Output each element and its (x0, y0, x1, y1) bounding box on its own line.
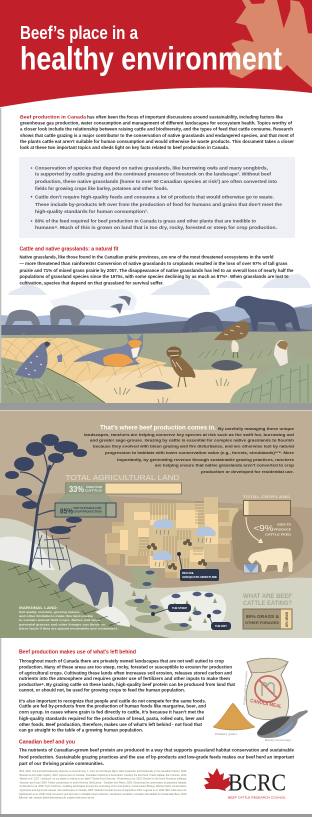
chart: total cropland: TOTAL CROPLAND (243, 494, 290, 499)
icons: crop bundles (147, 539, 207, 570)
text: that's where beef production comes in: progression to habitats with lower conservation value (e.g., forests, shrublands)⁶⁷⁸. More (105, 450, 295, 455)
text: left behind paragraph 1: production. Many of these areas are too steep, rocky, forested or susceptible to erosion for production (19, 665, 232, 670)
illustration: canola meal bag and feed: CANOLA MEAL (250, 698, 282, 710)
illustration: canola meal bag and feed: Distillers grains (215, 732, 238, 736)
panel: key facts: These include by-products left over from the production of food for humans and grains that don’t meet the (35, 202, 282, 207)
icon: logo maple leaf (204, 768, 233, 791)
chart: total agricultural land: TOTAL AGRICULTURAL LAND (66, 473, 180, 482)
divider band (0, 403, 312, 410)
chart: total cropland: <9% (254, 524, 274, 533)
panel: key facts: is supported by cattle grazing and the continued presence of livestock on the landscape¹. Without beef (35, 171, 271, 176)
header banner (0, 0, 312, 107)
text: that's where beef production comes in: landscapes, ranchers are helping conserve key species at risk such as the swift fox, burrowing owl (84, 432, 294, 437)
text: canadian beef and you: part of our thriving prairie communities. (19, 761, 104, 766)
text: left behind paragraph 1 (19, 659, 235, 693)
intro paragraph: has often been the focus of important discussions around sustainability, including factors like (87, 114, 283, 119)
text: marginal land: these lands if they are grazed moderately and sustainably. (19, 627, 118, 631)
text: left behind paragraph 2: corn syrup. In cases where grain is fed directly to cattle, it’s because it hasn’t met the (19, 709, 204, 714)
chart: total agricultural land: 85% (60, 506, 73, 516)
text: references: ¹Bird, 2018. Soil and field biodiversity depends on beef farming. J. Anim Sci and Range Mgmt, Beef production and biodiversity in the Canadian Prairies, 2018. (19, 769, 187, 773)
icon: scoop of grain (257, 710, 308, 738)
icon: songbird (274, 340, 288, 366)
chart: total agricultural land: USED FOR (86, 485, 102, 489)
text: marginal land: MARGINAL LAND: (19, 606, 58, 610)
panel: key facts: Conservation of species that depend on native grasslands, like burrowing owls and many songbirds, (35, 166, 268, 171)
text: references: ⁶Samson and Knopf 1994. Prairie conservation in North America. BioScience. ⁷Gauthier and Wiken, 2003. Monitoring the conservation of grassland habitats. (19, 780, 187, 784)
intro paragraph: shows that cattle grazing is a major contributor to the conservation of native grasslands and endangered species, and that most of (20, 133, 294, 138)
intro paragraph: look at these two important topics and sheds light on key facts related to beef production in Canada. (20, 145, 229, 150)
logo: BCRC (204, 768, 287, 800)
icon: bison right (50, 305, 85, 325)
text: that's where beef production comes in: because they evolved with bison grazing and fire disturbance, and are otherwise lost by natural (93, 444, 294, 448)
text: marginal land: perennial grasses and other forages can thrive on (19, 623, 105, 627)
label: the dry (207, 614, 231, 630)
title (20, 22, 282, 76)
panel: key facts: production, these native grasslands (home to over 60 Canadian species at risk²) are often converted into (35, 179, 277, 184)
sand path (75, 366, 257, 403)
icon: fox (57, 333, 143, 367)
illustration: canola meal bag and feed: Barley screenings (265, 738, 292, 742)
text: that's where beef production comes in: are helping ensure that native grasslands aren’t converted to crop (155, 462, 295, 468)
text: marginal land (19, 606, 118, 631)
text: left behind paragraph 1: Throughout much of Canada there are privately owned landscapes that are not well suited to crop (19, 659, 224, 664)
illustration: grassland scene (0, 274, 312, 403)
icons: rain clouds (153, 519, 216, 567)
chart: what are beef cattle eating: 20% GRAIN (285, 612, 289, 627)
landscape bands (0, 493, 312, 588)
heading: canadian beef and you: Canadian beef and you (19, 740, 75, 746)
icon: cream cow (248, 548, 293, 572)
hill grass strokes (8, 566, 120, 630)
chart: total cropland (232, 494, 303, 573)
green hill (0, 357, 105, 403)
chart: total cropland: CATTLE FEED (265, 532, 292, 536)
icon: birds (110, 296, 131, 314)
icon: sage grouse (15, 342, 51, 379)
illustration: cropland patchwork (105, 497, 238, 578)
text: native grasslands: populations of grassland species since the 1970s, with some species declining by as much as 87%⁵. When grasslands are lost to (20, 274, 289, 279)
text: left behind paragraph 1: cannot, or should not, be used for growing crops to feed the human population. (19, 688, 185, 693)
logo: BCRC: BCRC (228, 770, 286, 796)
label: rich soil (177, 552, 219, 581)
label: the steep (151, 604, 191, 616)
text: that's where beef production comes in: importantly, by generating revenue through sustainable grazing practices, ranchers (117, 457, 295, 462)
text: canadian beef and you (19, 748, 294, 766)
text: that's where beef production comes in (84, 424, 295, 474)
intro paragraph: greenhouse gas production, water consumption and management of different landscapes for ecosystem health. Topics worthy of (20, 120, 292, 125)
icon: dark cow (235, 296, 301, 331)
icon: grazing cow (182, 312, 224, 333)
text: canadian beef and you: food production. Sustainable grazing practices and the use of by-products and low-grade feeds makes our beef herd an important (19, 754, 294, 759)
panel: beef production illustration (0, 410, 312, 638)
icon: sage bush (230, 357, 312, 403)
icon: grass tufts (114, 378, 229, 403)
text: references: ⁸Fuhlendorf et al. 2009. Pyric herbivory: rewilding landscapes through the recoupling of fire and grazing. Conservation Biology. Alberta Prairie Conservation. (19, 784, 187, 788)
text: left behind paragraph 2: other foods. Beef production, therefore, makes use of what’s left behind - not food that (19, 722, 202, 727)
icon: grazing bison (58, 564, 113, 607)
title: Beef’s place in a (20, 22, 139, 43)
illustration: small cattle on steep and dry land (125, 567, 222, 631)
text: left behind paragraph 1: nutrients into the atmosphere and requires greater use of fertilizers and other inputs to make them (19, 676, 230, 681)
chart: what are beef cattle eating: OTHER FORAGES (245, 621, 280, 625)
intro paragraph: the plants cattle eat aren’t suitable for human consumption and would otherwise be waste products. This document takes a closer (20, 139, 294, 144)
green hill (0, 560, 170, 638)
icon: burrowing owl front (166, 346, 195, 387)
text: references: ⁹Agriculture and Agri-Food Canada, Soil Landscapes of Canada, 2018. Statistics Canada Census of Agriculture 2016. Legesse et al. 2018. Beef cattle feed use. (19, 788, 187, 792)
panel: key facts: high-quality standards for human consumption³. (35, 209, 148, 214)
text: left behind paragraph 2: high-quality standards required for the production of bread, pasta, rolled oats, beer and (19, 716, 204, 721)
text: references: More at www.beefresearch.ca/environment (19, 796, 94, 800)
text: marginal land: to sustain annual field crops. Native and tame (19, 618, 101, 622)
panel: key facts: Cattle don’t require high-quality feeds and consume a lot of products that would otherwise go to waste. (35, 194, 274, 199)
panel: key facts: fields for growing crops like barley, potatoes and other foods. (35, 186, 168, 191)
grass strokes (2, 333, 166, 383)
chart: what are beef cattle eating (243, 594, 292, 629)
intro paragraph (20, 114, 294, 150)
icon: water trough (244, 564, 258, 573)
chart: total agricultural land: CATTLE (85, 488, 102, 492)
illustration: canola meal bag and feed (213, 658, 308, 742)
label: the dry: THE DRY (215, 624, 227, 628)
label: rich soil: RICH SOIL (182, 571, 194, 575)
text: native grasslands: — more threatened than rainforests! Conversion of native grasslands to croplands resulted in the loss of over 97% of tall grass (20, 261, 288, 266)
text: that's where beef production comes in: By carefully managing these unique (218, 426, 295, 431)
panel: key facts (19, 157, 295, 238)
text: that's where beef production comes in: That’s where beef production comes in. (100, 424, 216, 432)
logo: BCRC: BEEF CATTLE RESEARCH COUNCIL (228, 796, 287, 800)
icon: burrowing owl rear (214, 321, 249, 358)
clouds (8, 274, 311, 310)
chart: total cropland: PRODUCE (274, 528, 291, 532)
chart: total agricultural land: CROP PRODUCTION (74, 510, 102, 514)
icon: tree (5, 434, 87, 570)
heading: left behind: Beef production makes use of what’s left behind (19, 650, 136, 656)
icon: burrows (135, 381, 173, 390)
heading: cattle and native grasslands: Cattle and native grasslands: a natural fit (20, 246, 119, 252)
panel: key facts: 80% of the feed required for beef production in Canada is grass and other plants that are inedible to (35, 219, 256, 224)
text: references: ²Species at risk public registry, 2019. Government of Canada. ³Canadian Cattlemen’s Association, Feeding the beef herd, Prairie Habitat Joint Venture, 2014. (19, 773, 187, 777)
text: native grasslands: cultivation, species that depend on that grassland for survival suffer. (20, 280, 164, 285)
text: canadian beef and you: The nutrients of Canadian-grown beef protein are produced in a way that supports grassland habitat conservation and sustainable (19, 748, 294, 753)
chart: what are beef cattle eating: CATTLE EATING? (243, 601, 292, 607)
icon: bison left (5, 310, 40, 325)
text: left behind paragraph 2: can go straight to the table of a growing human population. (19, 728, 143, 733)
mound grass (195, 348, 296, 365)
text: native grasslands: Native grasslands, like those found in the Canadian prairie provinces, are one of the most threatened ecosystems in the world (20, 254, 274, 259)
text: native grasslands: prairie and 71% of mixed grass prairie by 2007. The disappearance of native grasslands has led to an overall loss of nearly half the (20, 268, 294, 273)
text: left behind paragraph 2 (19, 698, 206, 733)
text: left behind paragraph 2: Cattle are fed by-products from the production of human foods like margarine, beer, and (19, 704, 206, 709)
white meadow (160, 591, 226, 631)
chart: total cropland: USED TO (277, 522, 292, 526)
icon: pile of meal (213, 703, 255, 730)
text: references (19, 769, 187, 800)
ground (0, 331, 312, 403)
text: marginal land: Soil quality, moisture, growing season, (19, 610, 80, 614)
chart: what are beef cattle eating: 80% GRASS & (246, 614, 279, 619)
text: marginal land: and other limitations make this land unable (19, 614, 93, 618)
text: left behind paragraph 2: It’s also important to recognize that people and cattle do not compete for the same foods. (19, 698, 206, 703)
panel: key facts: humans⁴. Much of this is grown on land that is too dry, rocky, forested or steep for crop production. (35, 225, 277, 230)
label: rich soil: ADEQUATE MOISTURE (182, 575, 217, 579)
text: references: ⁴Mottet et al. 2017. Livestock: on our plates or eating at our table? Global Food Security. ⁵Rosenberg et al. 2019. Decline of the North American avifauna. (19, 777, 187, 781)
text: references: Holtshausen et al. 2018. Feed conversion and land use in Canadian beef production. Henderson and Ellert. Canadian Roundtable for Sustainable Beef, 2019. (19, 792, 187, 796)
text: left behind paragraph 1: productive⁹. By grazing cattle on these lands, high-quality beef protein can be produced from land that (19, 682, 235, 687)
chart: what are beef cattle eating: WHAT ARE BEEF (243, 594, 292, 600)
chart: total agricultural land: 33% (69, 485, 84, 494)
mountains (0, 304, 312, 335)
intro paragraph: Beef production in Canada (20, 114, 86, 119)
text: that's where beef production comes in: and greater sage-grouse. Grazing by cattle is essential for complex native grasslands to flourish (90, 438, 295, 442)
chart: total agricultural land (55, 473, 182, 517)
tall straw grass area (0, 338, 167, 383)
text: that's where beef production comes in: production or developed for residential use. (201, 469, 294, 474)
text: native grasslands (20, 254, 294, 285)
label: the steep: THE STEEP (172, 606, 187, 610)
illustration: canola meal bag and feed: Grains unfit for humans (242, 670, 248, 705)
icon: maple leaf (228, 0, 312, 87)
chart: total agricultural land: NOT SUITABLE FOR (74, 506, 102, 510)
text: left behind paragraph 1: of agricultural crops. Cultivating these lands often increases soil erosion, releases stored carbon and (19, 670, 232, 675)
intro paragraph: a closer look include the relationship between raising cattle and biodiversity, and the types of feed that cattle consume. Research (20, 127, 293, 132)
